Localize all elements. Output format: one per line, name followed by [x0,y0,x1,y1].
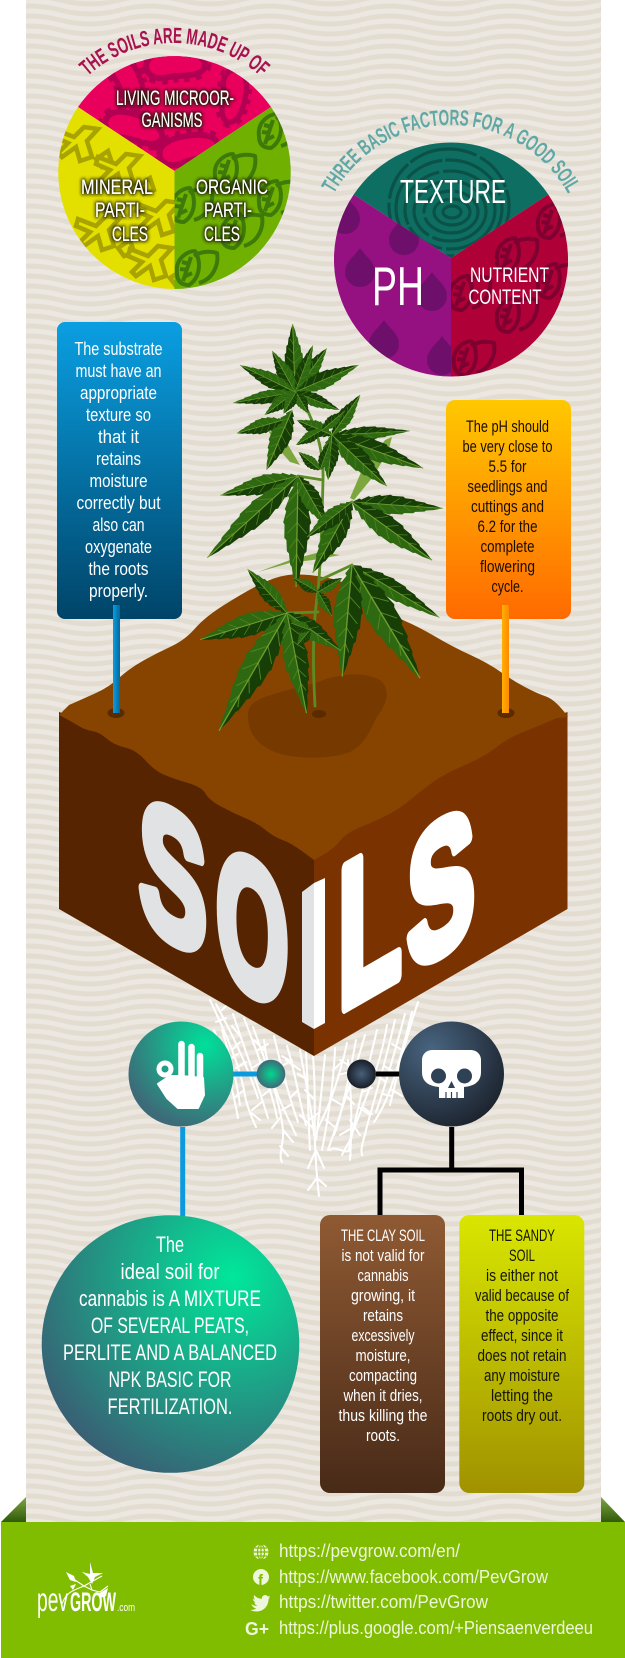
icon: facebook: f [258,1572,264,1589]
curved heading: the soils are made up of: THE SOILS ARE MADE UP OF [78,28,271,74]
word: SOILS [138,801,474,1029]
labels: soil components: CLES [204,223,240,246]
node: dark [347,1060,376,1088]
logo: pevgrow: GROW [70,1587,116,1617]
callout: substrate texture: correctly but [76,493,160,513]
word: SOILS: S [139,756,207,998]
label: texture: TEXTURE [400,173,506,210]
labels: soil components: PARTI- [204,199,252,222]
sector: texture [354,142,548,258]
footer fold right [601,1497,625,1522]
plant stems [288,392,352,706]
box: sandy soil: the opposite [486,1307,558,1325]
ideal soil circle: The [156,1232,184,1257]
box: clay soil: excessively [352,1327,415,1345]
word: SOILS: L [338,793,401,1055]
labels: soil components: GANISMS [142,109,202,132]
callout: substrate texture: must have an [76,361,162,381]
labels: soil components: PARTI- [95,199,145,222]
soil block [59,574,568,1088]
box: sandy soil: does not retain [478,1347,566,1365]
callout: substrate texture: the roots [88,559,148,579]
box: sandy soil: any moisture [484,1367,560,1385]
box: clay soil: is not valid for [342,1247,425,1265]
labels: soil components [81,87,268,246]
ideal soil circle: PERLITE AND A BALANCED [63,1340,277,1365]
icon: globe [254,1544,268,1560]
word: SOILS: S [407,765,475,1013]
logo: pevgrow: .com [117,1602,135,1614]
leaf: middle right [302,492,443,579]
callout: ph values: cuttings and [471,498,544,516]
footer band [1,1522,625,1658]
ideal soil circle: FERTILIZATION. [108,1394,232,1419]
pale background leaflets [258,430,392,572]
curved heading: three basic factors: THREE BASIC FACTORS FOR A GOOD SOIL [320,110,578,194]
box: sandy soil: valid because of [475,1287,569,1305]
sector: mineral particles [58,107,174,289]
callout: substrate texture: that it [98,427,139,447]
callout: substrate texture: moisture [90,471,148,491]
links: https://pevgrow.com/en/ [279,1541,460,1561]
label: nutrient content [468,264,549,309]
icon: ok hand [128,1022,234,1126]
sector: ph [334,194,451,376]
box: clay soil [320,1215,445,1493]
box: clay soil: roots. [366,1427,400,1445]
callout pole: blue [108,605,124,718]
callout: ph values: seedlings and [468,478,548,496]
links: https://twitter.com/PevGrow [279,1592,489,1612]
circle: three basic factors [330,135,578,380]
callout: substrate texture: texture so [86,405,151,425]
labels: soil components: CLES [112,223,148,246]
leaf: top cluster [232,324,362,474]
box: sandy soil: roots dry out. [482,1407,562,1425]
callout: ph values: flowering [480,558,535,576]
label: nutrient content: NUTRIENT [470,264,549,287]
box: sandy soil: THE SANDY [489,1227,555,1245]
box: clay soil: growing, it [351,1287,415,1305]
box: clay soil: when it dries, [343,1387,422,1405]
callout: ph values: cycle. [492,578,524,596]
callout: ph values: 5.5 for [488,458,527,476]
logo: pevgrow [37,1562,135,1618]
ideal soil circle: ideal soil for [120,1259,220,1284]
box: clay soil: THE CLAY SOIL [341,1227,425,1245]
cannabis plant [196,324,445,738]
circle: the soils are made up of [58,56,291,289]
callout: substrate texture [57,322,182,619]
label: nutrient content: CONTENT [468,286,542,309]
logo: pevgrow: pev [37,1581,68,1618]
word: SOILS: O [216,803,289,1053]
callout: substrate texture: The substrate [74,339,162,359]
icon: facebook [253,1569,269,1589]
sector: organic particles [174,107,291,289]
box: clay soil: compacting [349,1367,417,1385]
links: https://www.facebook.com/PevGrow [279,1567,549,1587]
icon: google plus: G+ [245,1619,269,1639]
callout: substrate texture: oxygenate [85,537,152,557]
ideal soil circle: OF SEVERAL PEATS, [91,1313,249,1338]
callout pole: orange [498,605,514,718]
ideal soil circle: cannabis is A MIXTURE [79,1286,261,1311]
sector: nutrient content [451,194,568,376]
callout: ph values: be very close to [462,438,552,456]
box: clay soil: cannabis [358,1267,408,1285]
box: sandy soil: SOIL [509,1247,535,1265]
callout: substrate texture: retains [96,449,141,469]
footer fold left [1,1497,26,1522]
box: sandy soil: is either not [486,1267,558,1285]
leaf: middle left [199,466,336,587]
callout: ph values [446,400,571,619]
links: https://plus.google.com/+Piensaenverdeeu [279,1618,593,1638]
label: ph: PH [372,255,424,317]
node: teal [257,1060,285,1088]
leaf: lower right [327,556,445,686]
box: clay soil: thus killing the [338,1407,428,1425]
roots [210,1000,418,1196]
callout: ph values: complete [480,538,534,556]
icon: twitter [250,1595,270,1612]
callout: ph values: The pH should [466,418,549,436]
ideal soil circle: NPK BASIC FOR [108,1367,232,1392]
callout: substrate texture: also can [92,515,144,535]
icon: skull [399,1022,504,1126]
word: SOILS: I [281,820,347,1088]
left face [59,712,314,1056]
labels: soil components: LIVING MICROOR- [116,87,234,110]
buds: small leaflets [278,389,349,649]
box: sandy soil [459,1215,584,1493]
leaf: upper right [294,390,427,494]
box: clay soil: retains [363,1307,403,1325]
connector: bad soils black lines [376,1074,522,1215]
links [279,1541,593,1638]
soil top mound [59,574,568,860]
connector: ideal soil blue line [183,1074,258,1216]
planting shadow [248,674,387,758]
labels: soil components: MINERAL [81,176,153,199]
word: SOILS: I [281,820,347,1088]
sector: living microorganisms [78,56,271,171]
callout: substrate texture: appropriate [80,383,157,403]
ideal soil circle [42,1215,299,1473]
labels: soil components: ORGANIC [196,176,268,199]
right face [314,712,568,1056]
callout: ph values: 6.2 for the [478,518,538,536]
box: clay soil: moisture, [356,1347,410,1365]
leaf: lower left [196,563,346,738]
box: sandy soil: letting the [491,1387,553,1405]
box: sandy soil: effect, since it [481,1327,563,1345]
callout: substrate texture: properly. [89,581,148,601]
